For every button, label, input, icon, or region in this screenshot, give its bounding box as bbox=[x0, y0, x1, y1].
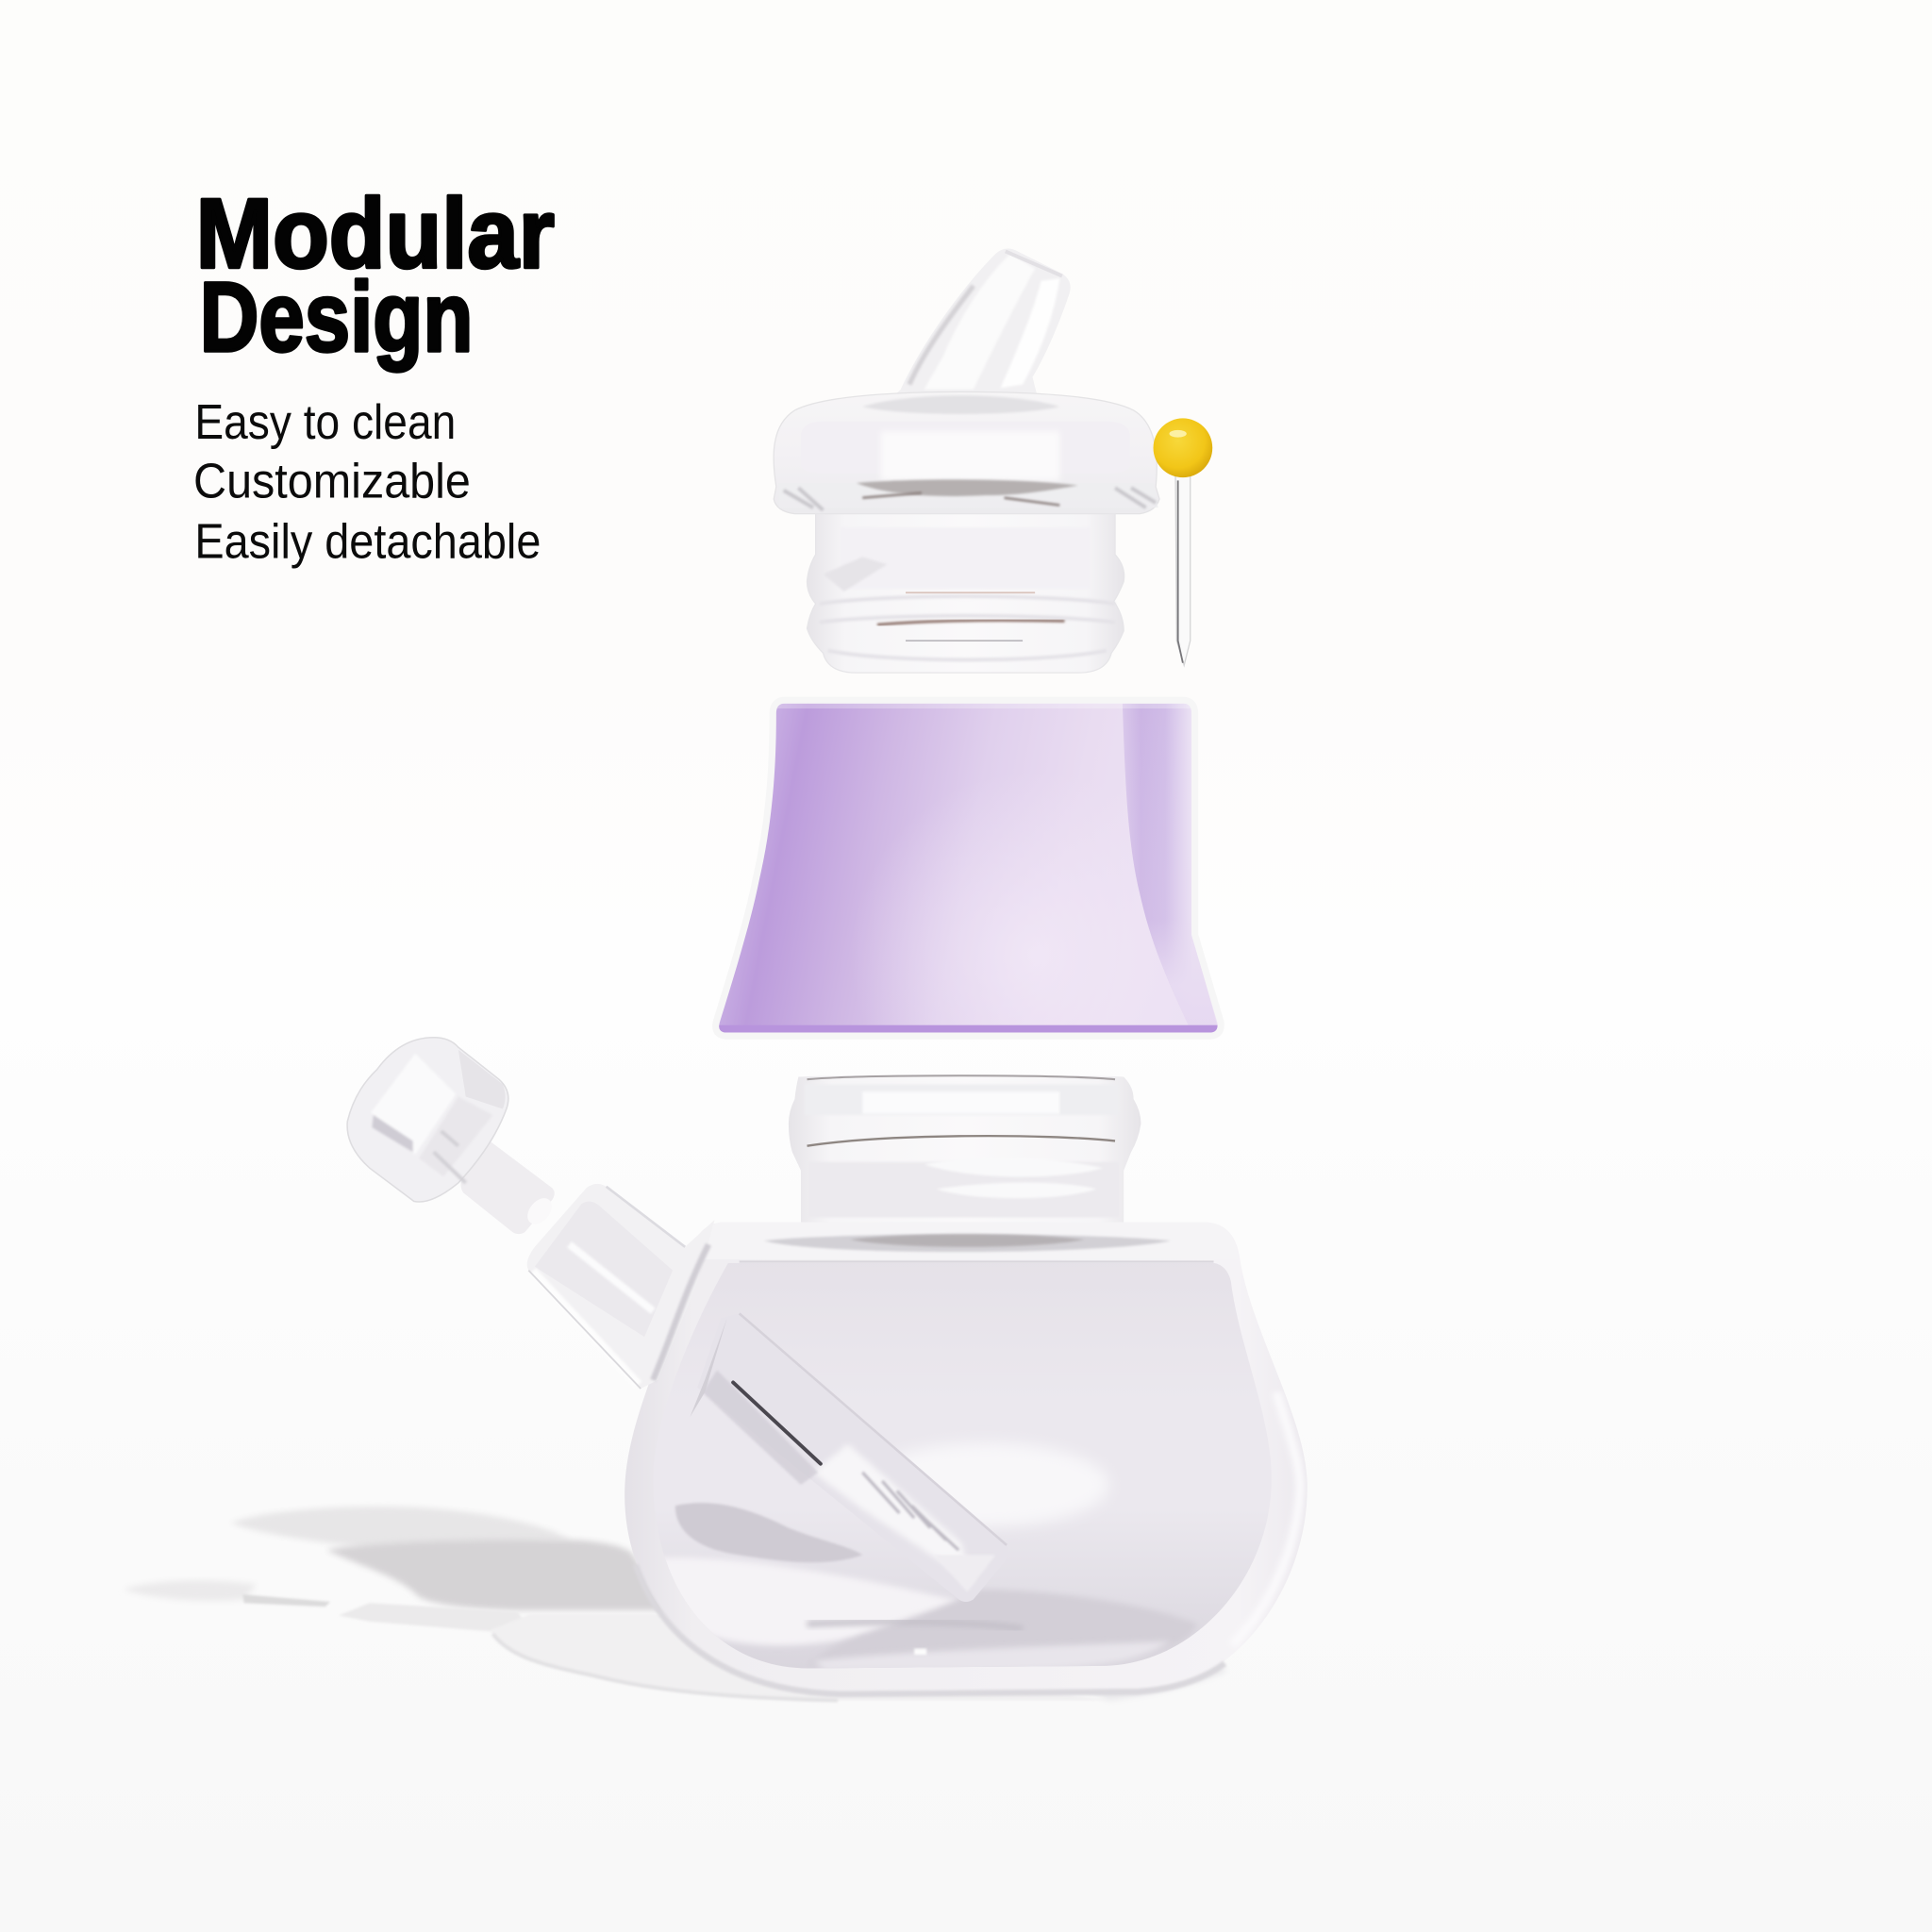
glass lid with spout bbox=[774, 249, 1159, 673]
inner tube bbox=[690, 1313, 1008, 1602]
knob bbox=[347, 1038, 508, 1202]
lid flange bbox=[774, 391, 1159, 514]
floor reflection bbox=[675, 1503, 862, 1562]
title: Modular bbox=[196, 178, 555, 289]
cast shadow on the floor bbox=[124, 1507, 1227, 1700]
threaded neck bbox=[789, 1074, 1141, 1224]
glass base bbox=[527, 1074, 1307, 1695]
shoulder bbox=[692, 1223, 1239, 1261]
threaded neck bbox=[808, 514, 1124, 673]
sleeve body bbox=[708, 696, 1226, 1041]
glass bowl piece with frosted joint bbox=[347, 1038, 557, 1234]
yellow pin bbox=[1154, 418, 1212, 665]
infographic canvas bbox=[127, 194, 1307, 1704]
lilac silicone sleeve bbox=[708, 696, 1226, 1041]
benefit list bbox=[193, 395, 541, 570]
frosted joint bbox=[460, 1140, 557, 1234]
inner glass volume bbox=[641, 1257, 1281, 1675]
benefit list: Customizable bbox=[193, 455, 471, 509]
bowl body bbox=[625, 1223, 1307, 1695]
sleeve halo bbox=[719, 704, 1218, 1033]
lower rim of the bowl bbox=[636, 1565, 1224, 1694]
side stem bbox=[527, 1184, 715, 1389]
benefit list: Easy to clean bbox=[194, 395, 456, 450]
benefit list: Easily detachable bbox=[194, 515, 541, 570]
title: Design bbox=[200, 262, 474, 373]
spout bbox=[893, 249, 1071, 397]
right wall reflection bbox=[1232, 1392, 1300, 1645]
title bbox=[196, 178, 555, 373]
